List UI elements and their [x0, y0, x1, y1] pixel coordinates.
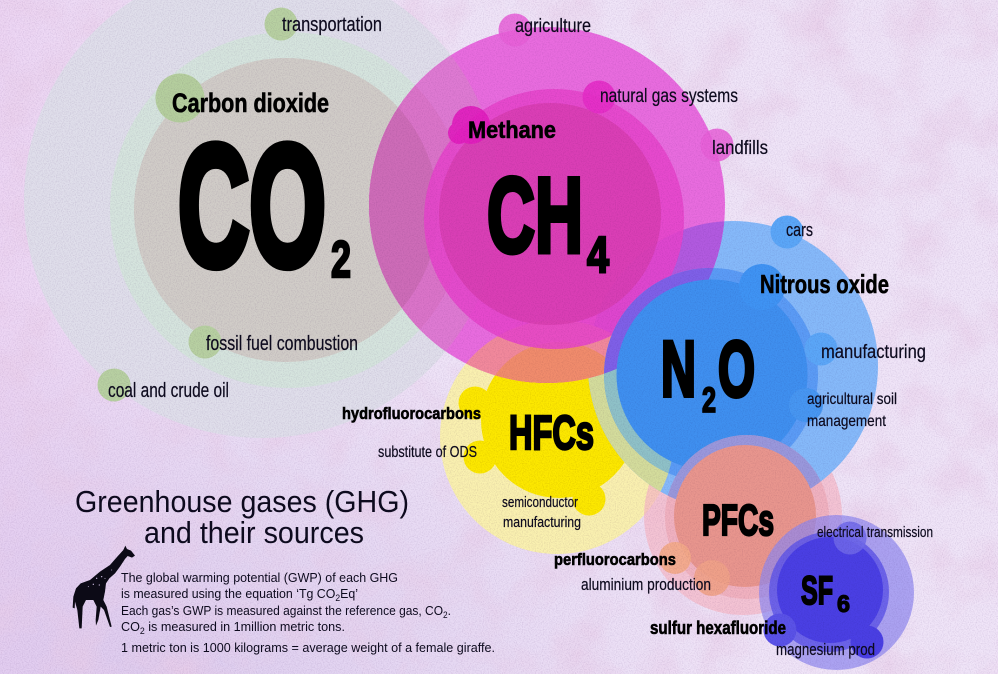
subscript 2: 2	[702, 381, 716, 420]
label: agricultural soil management: agricultural soil	[807, 391, 897, 408]
title	[75, 484, 409, 550]
icon: nitrous oxide dot	[739, 264, 785, 310]
subscript 2: 2	[331, 231, 351, 289]
explanatory text: Each gas’s GWP is measured against the reference gas, CO	[121, 603, 470, 618]
label: aluminium production: aluminium production	[581, 575, 711, 594]
explanatory text: 2	[335, 593, 340, 603]
label: semiconductor manufacturing: semiconductor	[502, 494, 578, 511]
overlap with carbon dioxide	[369, 55, 482, 352]
explanatory text: 2	[140, 626, 145, 636]
formula N2O: N: N	[661, 324, 696, 413]
subscript 6: 6	[837, 591, 850, 618]
icon: semiconductor dot	[572, 482, 606, 516]
explanatory text: is measured using the equation ‘Tg CO	[121, 586, 346, 601]
explanatory text: is measured in 1million metric tons.	[145, 619, 345, 634]
explanatory text: CO	[121, 619, 140, 634]
heading: perfluorocarbons: perfluorocarbons	[554, 550, 676, 569]
explanatory text: .	[448, 603, 451, 618]
icon: manufacturing dot	[804, 332, 838, 366]
label: substitute of ODS: substitute of ODS	[378, 444, 477, 461]
icon: perfluorocarbons dot	[694, 560, 730, 596]
label: agricultural soil management	[807, 391, 897, 430]
explanatory text: Eq’	[340, 586, 358, 601]
icon: substitute of ODS dot	[464, 440, 496, 474]
icon: agricultural soil dot	[789, 388, 823, 422]
icon: transportation dot	[264, 8, 298, 40]
label: cars: cars	[786, 220, 813, 240]
ring overlap with methane	[604, 268, 714, 374]
label: manufacturing: manufacturing	[821, 342, 926, 363]
icon: hydrofluorocarbons dot	[458, 386, 492, 420]
formula HFCs: HFCs	[509, 407, 594, 460]
formula CH4: CH	[487, 155, 583, 275]
subscript 4: 4	[587, 226, 609, 283]
icon: carbon dioxide dot	[156, 74, 204, 122]
heading: hydrofluorocarbons: hydrofluorocarbons	[342, 404, 481, 423]
ring overlap with nitrous oxide	[668, 435, 821, 500]
label: landfills: landfills	[712, 138, 768, 159]
label: magnesium prod: magnesium prod	[776, 640, 875, 659]
label: coal and crude oil: coal and crude oil	[108, 380, 229, 402]
icon: natural gas dot	[582, 80, 616, 114]
label: agriculture: agriculture	[515, 16, 591, 37]
heading: Methane: Methane	[468, 117, 556, 144]
icon: magnesium dot	[850, 626, 884, 658]
icon: aluminium dot	[659, 542, 691, 574]
icon: giraffe	[73, 546, 135, 628]
panel: methane	[369, 14, 768, 383]
label: electrical transmission: electrical transmission	[817, 524, 933, 541]
icon: landfills dot	[700, 128, 734, 162]
formula SF6: SF	[801, 569, 833, 613]
heading: sulfur hexafluoride: sulfur hexafluoride	[650, 618, 786, 638]
panel: nitrous oxide outer circle	[588, 221, 878, 500]
icon: fossil fuel dot	[188, 326, 222, 358]
icon: coal dot	[98, 368, 130, 402]
icon: agriculture dot	[498, 14, 532, 46]
panel: perfluorocarbons	[554, 435, 829, 599]
heading: Carbon dioxide: Carbon dioxide	[172, 88, 329, 118]
label: natural gas systems: natural gas systems	[600, 86, 738, 107]
overlap with HFCs	[466, 322, 612, 383]
explanatory text: 1 metric ton is 1000 kilograms = average weight of a female giraffe.	[121, 640, 495, 655]
label: transportation: transportation	[282, 14, 382, 36]
ring overlap with HFCs	[604, 334, 672, 473]
heading: Nitrous oxide: Nitrous oxide	[760, 269, 889, 299]
explanatory text: 2	[443, 610, 448, 620]
panel: nitrous oxide core	[604, 216, 925, 476]
title: and their sources	[144, 515, 364, 550]
formula CO2: CO	[178, 110, 326, 302]
icon: sulfur hexafluoride dot	[764, 614, 796, 646]
formula N2O: O: O	[718, 324, 755, 413]
explanatory text: The global warming potential (GWP) of each GHG	[121, 570, 398, 585]
panel: sulfur hexafluoride	[650, 515, 933, 670]
formula PFCs: PFCs	[702, 496, 774, 545]
label: agricultural soil management: management	[807, 413, 886, 430]
panel: carbon dioxide	[24, 0, 500, 438]
icon: electrical transmission dot	[834, 522, 866, 554]
label: fossil fuel combustion: fossil fuel combustion	[206, 333, 358, 355]
overlap with nitrous oxide	[590, 221, 724, 378]
label: semiconductor manufacturing: manufacturing	[503, 514, 581, 531]
halo: perfluorocarbons outer circle	[644, 417, 842, 615]
title: Greenhouse gases (GHG)	[75, 484, 409, 519]
icon: cars dot	[770, 216, 804, 248]
icon: methane dot	[448, 106, 490, 144]
panel: hydrofluorocarbons	[342, 320, 674, 554]
label: semiconductor manufacturing	[502, 494, 581, 531]
explanatory text	[121, 570, 495, 655]
